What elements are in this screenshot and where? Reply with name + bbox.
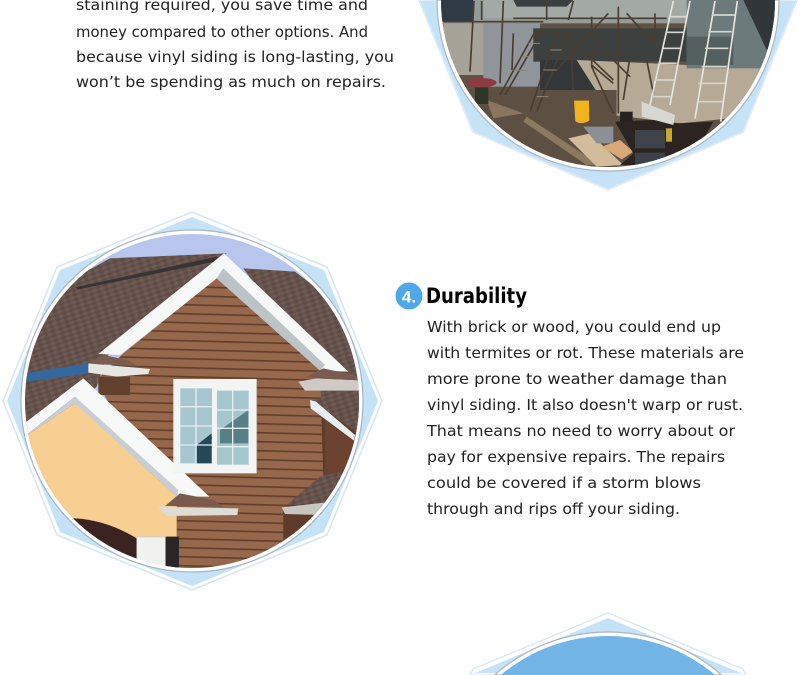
stucco gable [20, 403, 177, 537]
left eave [26, 363, 88, 382]
right side shaded wall [325, 420, 355, 477]
porch arch [73, 518, 137, 558]
right eave [298, 378, 358, 391]
ground and debris [467, 90, 714, 167]
text block: savings paragraph: won’t be spending as much on repairs. [76, 73, 386, 91]
photo: scaffolding and ladders against a house [441, 0, 775, 167]
text block: durability paragraph: pay for expensive repairs. The repairs [427, 448, 725, 466]
lower eave [158, 507, 238, 516]
text block: durability paragraph: With brick or wood, you could end up [427, 318, 721, 336]
dark lower right wall [280, 404, 359, 543]
siding wall [97, 278, 323, 573]
image badge: next section sky photo [470, 613, 746, 675]
scaffold frames [443, 1, 667, 113]
text block: durability paragraph: with termites or rot. These materials are [427, 344, 744, 362]
window [173, 379, 257, 473]
text block: savings paragraph: money compared to other options. And [76, 23, 368, 41]
text block: savings paragraph: because vinyl siding is long-lasting, you [76, 48, 394, 66]
main gable trim [98, 253, 348, 372]
text block: durability paragraph [426, 318, 744, 518]
yellow bucket [574, 101, 589, 123]
icon: number badge 4 [396, 282, 422, 310]
section: durability [396, 282, 744, 518]
wheelbarrow [467, 78, 497, 104]
image badge: siding installation scaffolding [419, 0, 797, 190]
text block: durability paragraph: through and rips off your siding. [427, 500, 680, 518]
photo: blue sky [501, 636, 715, 675]
text block: durability paragraph: more prone to weather damage than [427, 370, 727, 388]
text block: durability paragraph: vinyl siding. It also doesn't warp or rust. [427, 396, 743, 414]
roof shingles [20, 253, 227, 460]
text block: durability paragraph: That means no need to worry about or [426, 422, 736, 440]
icon: number badge 4: 4. [402, 288, 416, 306]
text block: savings paragraph [76, 0, 394, 91]
text block: durability paragraph: could be covered if a storm blows [427, 474, 701, 492]
lower gable trim [20, 378, 209, 497]
panel: previous section text [76, 0, 394, 91]
heading: Durability: Durability [426, 284, 527, 308]
ladders [650, 1, 737, 122]
right lower roofs [312, 394, 359, 432]
photo: brown sided house with gables [20, 230, 367, 573]
image badge: house with vinyl siding [3, 212, 382, 590]
